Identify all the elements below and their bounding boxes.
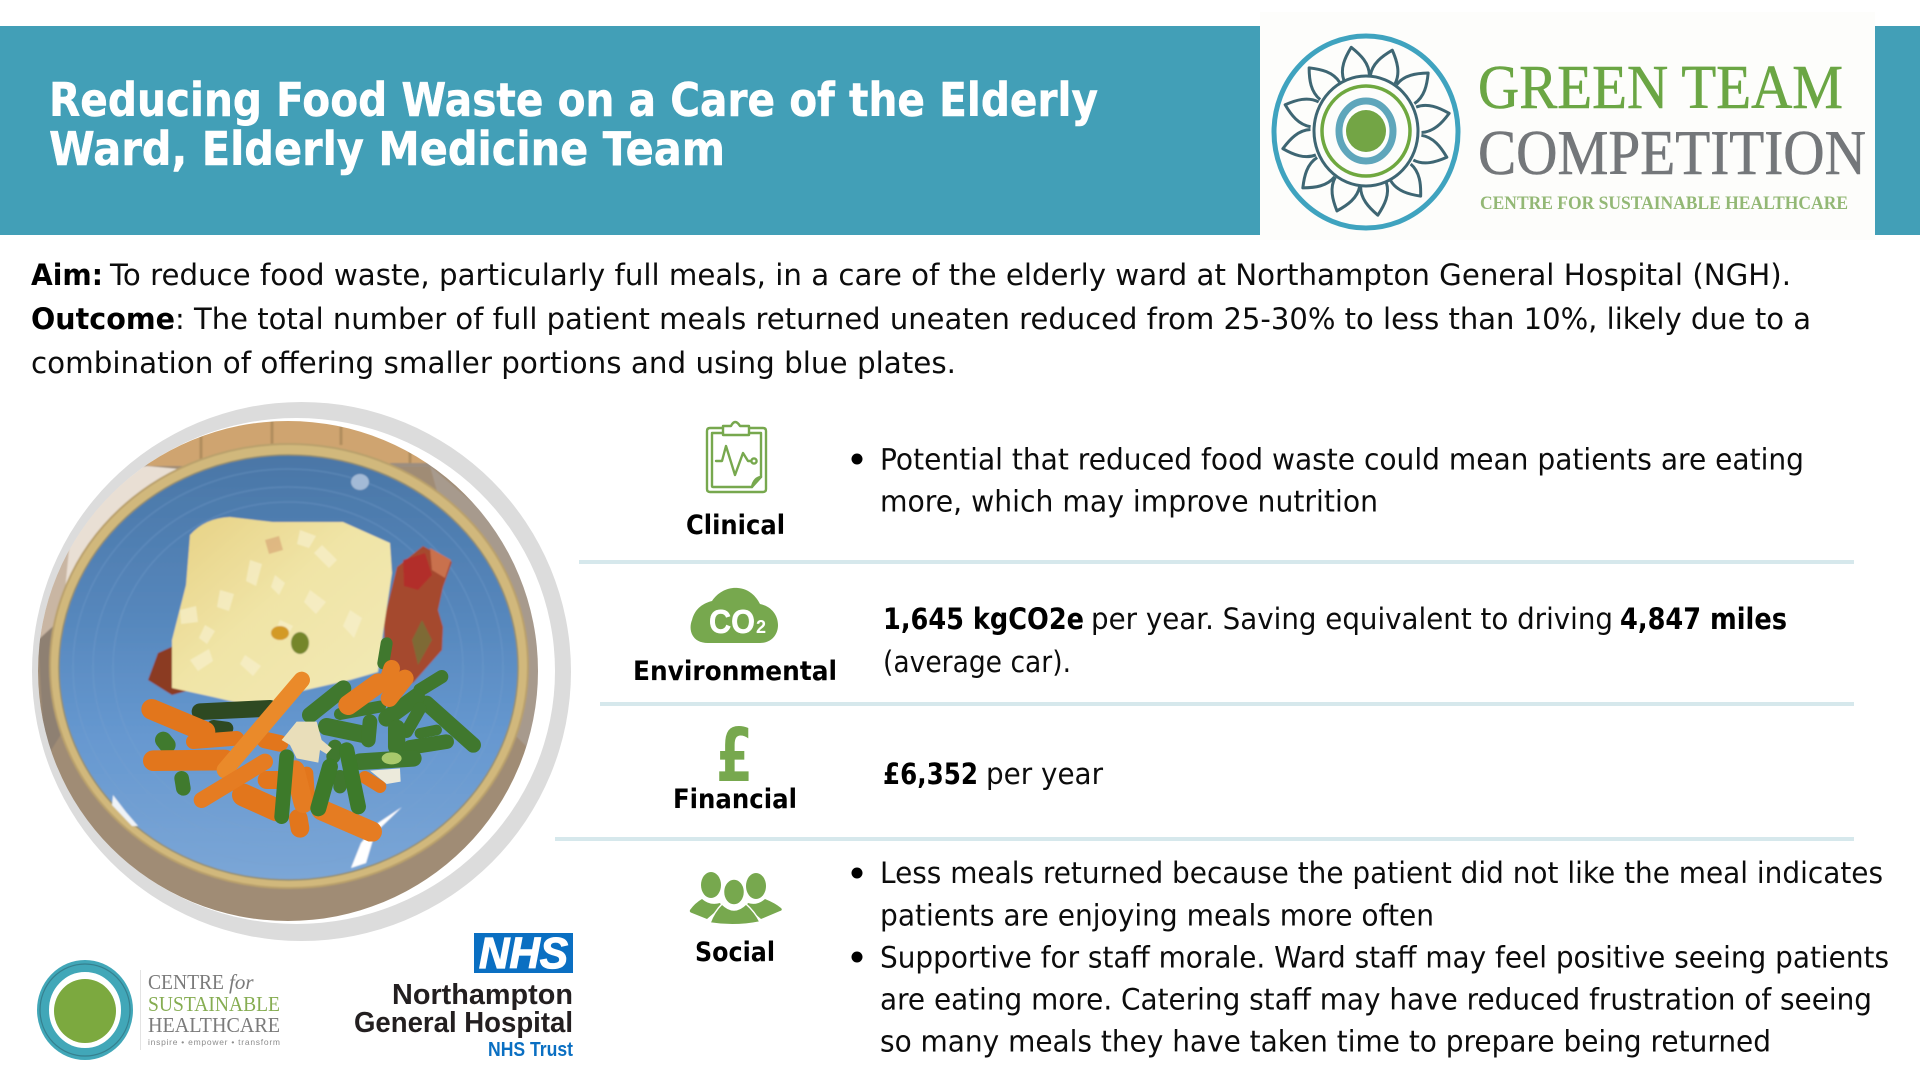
title xyxy=(49,73,1098,176)
bullet text: clinical xyxy=(852,442,1804,518)
row: financial xyxy=(673,713,1103,815)
logo wordmark xyxy=(1478,54,1866,214)
logo: NHS Northampton General Hospital: Northampton xyxy=(392,979,573,1011)
photo: meal on blue plate in circular frame xyxy=(30,402,571,941)
beans under xyxy=(200,708,270,728)
text block: aim and outcome: Aim: xyxy=(31,258,103,292)
bullet text: clinical: more, which may improve nutrition xyxy=(880,484,1378,518)
text: carbon saving: 1,645 kgCO2e xyxy=(883,602,1084,636)
logo wordmark: CENTRE FOR SUSTAINABLE HEALTHCARE xyxy=(1480,193,1848,214)
row: clinical: Clinical xyxy=(686,510,785,541)
logo wordmark: COMPETITION xyxy=(1478,118,1866,188)
mince sauce xyxy=(384,546,452,683)
bullet text: social xyxy=(852,856,1889,1058)
text block: aim and outcome: Outcome xyxy=(31,302,175,336)
bullet text: social: Less meals returned because the patient did not like the meal indicates xyxy=(880,856,1883,890)
text: carbon saving: 4,847 miles xyxy=(1620,602,1787,636)
plate rim xyxy=(50,444,528,888)
text: cost saving xyxy=(883,757,1103,791)
logo: NHS Northampton General Hospital xyxy=(354,929,573,1061)
text block: aim and outcome: To reduce food waste, particularly full meals, in a care of the elderly ward at Northampton General Hospital (NGH). xyxy=(109,258,1791,292)
logo wordmark: GREEN TEAM xyxy=(1478,54,1843,122)
logo: Centre for Sustainable Healthcare: SUSTAINABLE xyxy=(148,992,280,1016)
logo: Green Team Competition xyxy=(1260,12,1875,240)
logo: NHS Northampton General Hospital: General Hospital xyxy=(354,1007,573,1039)
carrots under xyxy=(152,709,380,828)
icon: sun emblem xyxy=(1274,36,1458,228)
cauliflower xyxy=(282,722,332,763)
icon: clipboard with pulse xyxy=(707,422,766,492)
title: Ward, Elderly Medicine Team xyxy=(49,122,725,176)
row: environmental: Environmental xyxy=(633,656,837,687)
beans front xyxy=(282,750,358,817)
row: clinical xyxy=(686,422,1804,541)
beans mid xyxy=(310,643,473,787)
bullet text: social: Supportive for staff morale. Ward staff may feel positive seeing patients xyxy=(880,940,1889,974)
logo: Centre for Sustainable Healthcare xyxy=(40,964,280,1056)
icon: green circle in teal ring xyxy=(40,964,130,1056)
text block: aim and outcome xyxy=(31,258,1811,380)
mash topping xyxy=(172,517,392,708)
text block: aim and outcome: : The total number of full patient meals returned uneaten reduced from 25-30% to less than 10%, likely due to a xyxy=(175,302,1811,336)
header banner xyxy=(0,26,1920,235)
logo: Centre for Sustainable Healthcare: for xyxy=(229,970,254,994)
row: social xyxy=(690,856,1889,1058)
carrots top xyxy=(202,668,405,832)
icon: pound sign: £ xyxy=(716,713,753,799)
bullet text: social: so many meals they have taken time to prepare being returned xyxy=(880,1024,1771,1058)
bullet text: clinical: Potential that reduced food waste could mean patients are eating xyxy=(880,442,1804,476)
row: social: Social xyxy=(695,937,775,968)
icon: CO2 cloud: 2 xyxy=(756,617,766,637)
text: cost saving: £6,352 xyxy=(883,757,978,791)
vegetables xyxy=(152,643,473,832)
logo: Centre for Sustainable Healthcare: HEALTHCARE xyxy=(148,1013,280,1037)
text: carbon saving xyxy=(883,602,1787,679)
icon: group of people xyxy=(690,872,782,925)
icon: CO2 cloud xyxy=(691,588,778,643)
logo: NHS Northampton General Hospital: NHS Trust xyxy=(488,1039,573,1061)
icon: CO2 cloud: CO xyxy=(709,603,755,640)
plate blue xyxy=(59,455,518,880)
table surface xyxy=(38,464,526,921)
text block: aim and outcome: combination of offering smaller portions and using blue plates. xyxy=(31,346,956,380)
logo: Centre for Sustainable Healthcare: inspire • empower • transform xyxy=(148,1037,280,1047)
row: environmental xyxy=(633,588,1787,687)
bullet text: social: patients are enjoying meals more often xyxy=(880,898,1434,932)
icon: NHS lozenge: NHS xyxy=(479,929,568,978)
bullet text: social: are eating more. Catering staff may have reduced frustration of seeing xyxy=(880,982,1872,1016)
text: carbon saving: (average car). xyxy=(883,645,1071,679)
text: cost saving: per year xyxy=(986,757,1103,791)
text: carbon saving: per year. Saving equivalent to driving xyxy=(1091,602,1613,636)
row: financial: Financial xyxy=(673,784,797,815)
plate highlights xyxy=(351,807,402,868)
logo: Centre for Sustainable Healthcare: CENTRE xyxy=(148,970,224,994)
title: Reducing Food Waste on a Care of the Elderly xyxy=(49,73,1098,127)
